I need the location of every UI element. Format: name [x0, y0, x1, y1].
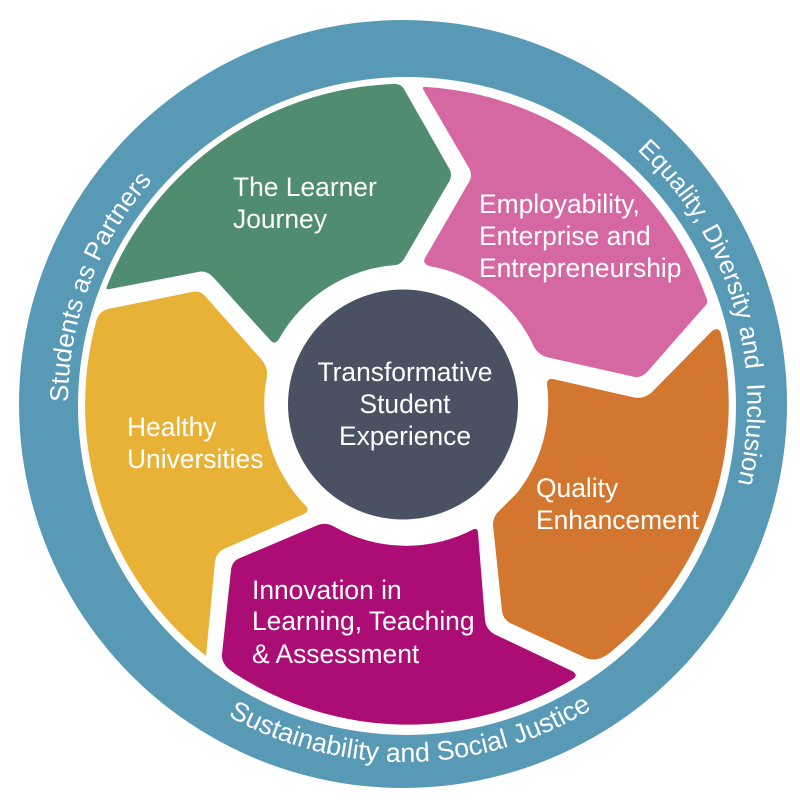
centre circle: transformative student experience: Student [360, 389, 451, 419]
centre circle: transformative student experience: Experience [339, 421, 471, 451]
segment: employability, enterprise and entrepreneurship: Entrepreneurship [479, 253, 681, 283]
segment: the learner journey: The Learner [233, 172, 377, 202]
segment: healthy universities: Healthy [127, 412, 217, 442]
ring label: equality, diversity and inclusion: Equality, Diversity and Inclusion [638, 138, 766, 484]
segment: the learner journey: Journey [233, 204, 328, 234]
ring label: students as partners: Students as Partners [50, 174, 150, 401]
segment: quality enhancement [493, 329, 729, 659]
segment: employability, enterprise and entrepreneurship: Employability, [479, 189, 640, 219]
segment: quality enhancement: Quality [536, 473, 619, 503]
segment: quality enhancement: Enhancement [536, 505, 700, 535]
segment: the learner journey [106, 84, 451, 343]
centre circle: transformative student experience: Transformative [317, 357, 493, 387]
segment: employability, enterprise and entrepreneurship [423, 87, 707, 377]
segment: innovation in learning, teaching and assessment: Innovation in [252, 575, 402, 605]
segment: innovation in learning, teaching and assessment [222, 524, 576, 725]
segment: healthy universities [85, 292, 308, 656]
centre circle: transformative student experience [288, 290, 518, 520]
segment: employability, enterprise and entrepreneurship: Enterprise and [479, 221, 651, 251]
segment: innovation in learning, teaching and assessment: Learning, Teaching [252, 606, 475, 636]
segment: healthy universities: Universities [127, 444, 263, 474]
ring label: sustainability and social justice: Sustainability and Social Justice [230, 699, 590, 766]
segment: innovation in learning, teaching and assessment: & Assessment [252, 639, 420, 669]
